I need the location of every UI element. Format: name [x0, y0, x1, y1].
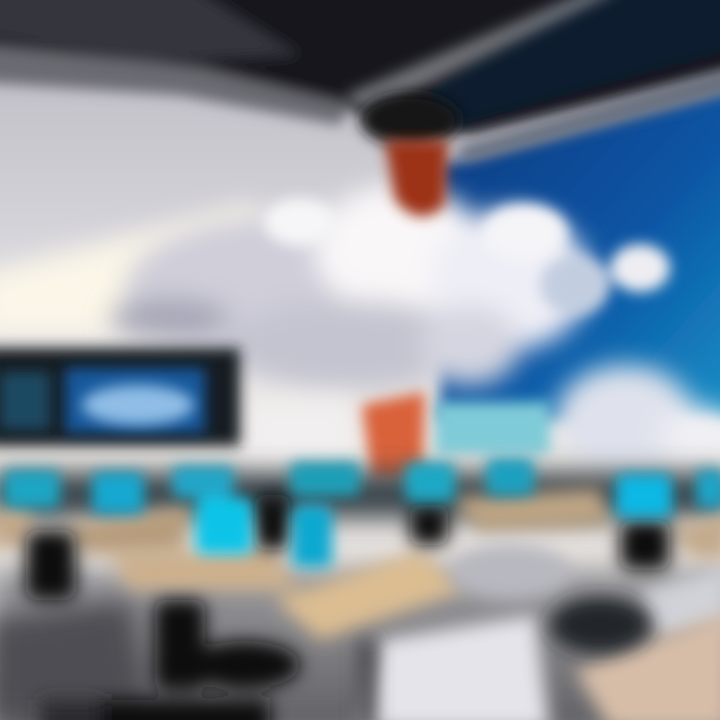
ceiling light beam [345, 0, 620, 115]
orange column [362, 392, 425, 480]
wall light patch [0, 205, 290, 335]
lower cloud right [555, 365, 720, 475]
ceiling edge band [455, 66, 720, 162]
cloud [110, 185, 670, 390]
floor [0, 570, 720, 720]
light cyan window [435, 402, 550, 454]
cyan monitors [4, 458, 720, 567]
sky [440, 85, 720, 420]
white lower wall [245, 400, 355, 470]
wall screen [0, 348, 240, 446]
tables [0, 488, 720, 720]
dark chairs [26, 495, 670, 720]
silver chairs [450, 544, 570, 600]
red hanging column [360, 94, 460, 216]
desk band [0, 472, 720, 518]
ceiling [0, 0, 720, 162]
